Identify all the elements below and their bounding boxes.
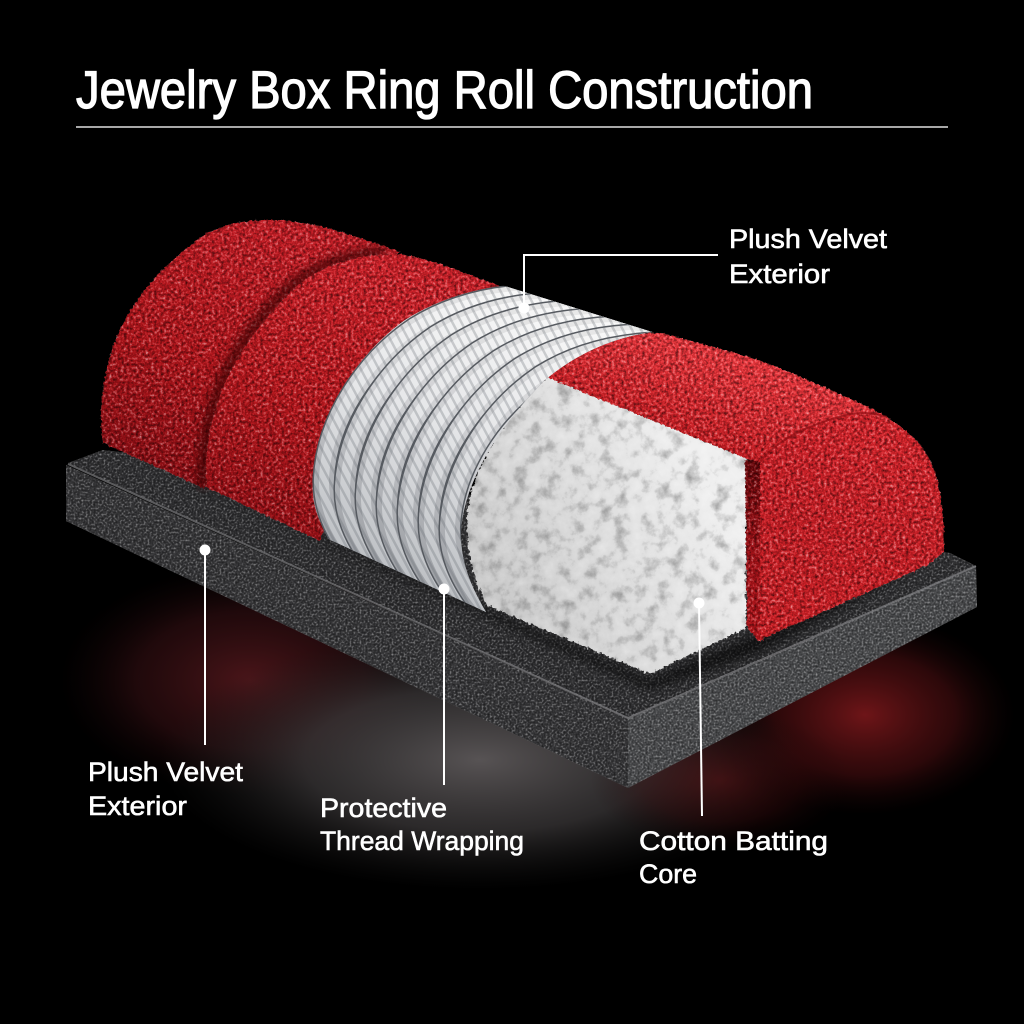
leader dot left <box>200 544 210 556</box>
label left: Exterior <box>88 791 187 821</box>
rope strand 2 <box>345 303 621 574</box>
label right: Cotton Batting <box>639 826 828 856</box>
label right: Core <box>639 859 697 889</box>
base left front side <box>66 465 628 788</box>
label top: Exterior <box>729 259 830 289</box>
leader line top <box>524 255 718 308</box>
callout: plush velvet exterior (lower left) <box>88 544 244 821</box>
label top: Plush Velvet <box>729 224 888 254</box>
rope strand 1 <box>324 295 600 566</box>
base top face <box>68 450 976 718</box>
velvet end front face <box>760 414 944 640</box>
rope strand 5 <box>408 327 684 598</box>
rope strand 7 <box>438 332 652 612</box>
foam base <box>66 450 977 788</box>
velvet end side strip <box>745 460 763 641</box>
leader dot middle <box>438 584 450 594</box>
title: Jewelry Box Ring Roll Construction <box>76 61 813 120</box>
title rule <box>76 126 948 128</box>
base right side <box>628 566 977 788</box>
rope strand 6 <box>417 324 652 604</box>
cotton batting core <box>467 376 747 674</box>
leader dot top <box>518 302 530 314</box>
roll contact shadow <box>100 442 945 690</box>
callout: cotton batting core <box>639 598 828 889</box>
leader line right <box>699 603 702 816</box>
base edge highlight <box>68 464 976 718</box>
velvet end top surface <box>530 333 910 464</box>
rope strand 3 <box>366 311 642 582</box>
leader dot right <box>694 598 704 608</box>
wrap backing <box>313 285 660 612</box>
label left: Plush Velvet <box>88 757 244 787</box>
red velvet segment one <box>101 220 400 488</box>
callout: plush velvet exterior (top) <box>518 224 888 314</box>
label middle: Thread Wrapping <box>320 826 524 856</box>
callout: protective thread wrapping <box>320 584 524 856</box>
label middle: Protective <box>320 793 447 823</box>
protective thread wrapping <box>312 286 652 612</box>
leader line left <box>204 550 206 745</box>
floor glow <box>60 565 1015 890</box>
red velvet segment two <box>206 254 514 541</box>
velvet end crease <box>760 413 887 462</box>
rope strand 4 <box>387 319 663 590</box>
gap shadow between segments <box>204 252 385 488</box>
leader line middle <box>443 589 445 785</box>
red velvet end piece <box>530 333 944 641</box>
